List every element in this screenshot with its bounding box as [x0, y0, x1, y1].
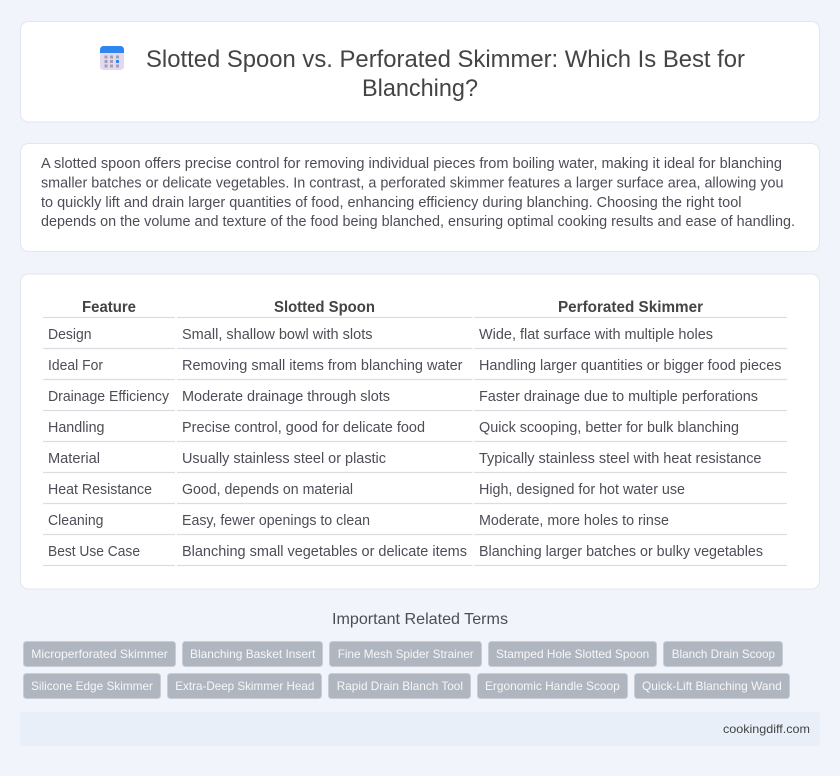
tag	[330, 642, 482, 666]
row: best use case: Blanching small vegetables or delicate items	[182, 544, 467, 560]
row: material: Material	[48, 451, 100, 467]
table header: Perforated Skimmer	[558, 299, 703, 316]
title: Blanching?	[362, 75, 478, 102]
related terms tags	[24, 642, 790, 698]
row: best use case: Blanching larger batches or bulky vegetables	[479, 544, 763, 560]
tag	[182, 642, 322, 666]
tag: Blanch Drain Scoop	[672, 647, 775, 661]
text block: introduction	[41, 156, 795, 230]
table header: Slotted Spoon	[274, 299, 375, 316]
tag	[478, 674, 628, 698]
row: design: Small, shallow bowl with slots	[182, 327, 372, 343]
tag: Silicone Edge Skimmer	[31, 679, 153, 693]
row: design: Design	[48, 327, 92, 343]
tag	[168, 674, 322, 698]
panel: introduction text	[20, 144, 820, 252]
row: heat resistance: High, designed for hot water use	[479, 482, 685, 498]
tag	[488, 642, 656, 666]
tag: Stamped Hole Slotted Spoon	[496, 647, 649, 661]
row: cleaning: Easy, fewer openings to clean	[182, 513, 370, 529]
tag	[328, 674, 470, 698]
row: material	[48, 451, 762, 467]
footer: cookingdiff.com	[723, 722, 810, 736]
tag	[24, 674, 160, 698]
tag: Fine Mesh Spider Strainer	[338, 647, 474, 661]
row: cleaning: Cleaning	[48, 513, 104, 529]
tag: Rapid Drain Blanch Tool	[337, 679, 463, 693]
panel: comparison table	[20, 274, 820, 589]
row: heat resistance: Heat Resistance	[48, 482, 152, 498]
text block: introduction: depends on the volume and texture of the food being blanched, ensuring optimal cooking results and ease of handling.	[41, 214, 795, 230]
row: design	[48, 327, 713, 343]
table header: Feature	[82, 299, 136, 316]
row: ideal for: Removing small items from blanching water	[182, 358, 463, 374]
tag: Blanching Basket Insert	[190, 647, 316, 661]
row: ideal for: Ideal For	[48, 358, 103, 374]
row: material: Typically stainless steel with heat resistance	[479, 451, 762, 467]
row: best use case	[48, 544, 763, 560]
row: drainage efficiency: Moderate drainage through slots	[182, 389, 390, 405]
row: handling: Precise control, good for delicate food	[182, 420, 425, 436]
row: cleaning	[48, 513, 669, 529]
row: drainage efficiency: Drainage Efficiency	[48, 389, 170, 405]
tag: Quick-Lift Blanching Wand	[642, 679, 782, 693]
row: drainage efficiency	[48, 389, 758, 405]
row: heat resistance: Good, depends on material	[182, 482, 353, 498]
tag	[634, 674, 790, 698]
heading: important related terms: Important Related Terms	[332, 611, 508, 628]
row: material: Usually stainless steel or plastic	[182, 451, 386, 467]
tag: Extra-Deep Skimmer Head	[175, 679, 314, 693]
tag: Microperforated Skimmer	[31, 647, 168, 661]
footer	[20, 712, 820, 746]
tag	[664, 642, 782, 666]
row: handling: Handling	[48, 420, 104, 436]
title	[146, 46, 745, 102]
row: heat resistance	[48, 482, 685, 498]
panel: title header	[20, 22, 820, 122]
row: handling	[48, 420, 739, 436]
row: design: Wide, flat surface with multiple holes	[479, 327, 713, 343]
table header	[82, 299, 703, 316]
title: Slotted Spoon vs. Perforated Skimmer: Which Is Best for	[146, 46, 745, 73]
tag	[24, 642, 176, 666]
icon: calendar	[100, 46, 124, 70]
row: handling: Quick scooping, better for bulk blanching	[479, 420, 739, 436]
text block: introduction: smaller batches or delicate vegetables. In contrast, a perforated skimmer features a larger surface area, allowing you	[41, 176, 784, 192]
text block: introduction: A slotted spoon offers precise control for removing individual pieces from boiling water, making it ideal for blanching	[41, 156, 782, 172]
tag: Ergonomic Handle Scoop	[485, 679, 620, 693]
text block: introduction: to quickly lift and drain larger quantities of food, enhancing efficiency during blanching. Choosing the right tool	[41, 195, 742, 211]
row: cleaning: Moderate, more holes to rinse	[479, 513, 669, 529]
row: ideal for	[48, 358, 782, 374]
row: drainage efficiency: Faster drainage due to multiple perforations	[479, 389, 758, 405]
row: best use case: Best Use Case	[48, 544, 140, 560]
row: ideal for: Handling larger quantities or bigger food pieces	[479, 358, 782, 374]
